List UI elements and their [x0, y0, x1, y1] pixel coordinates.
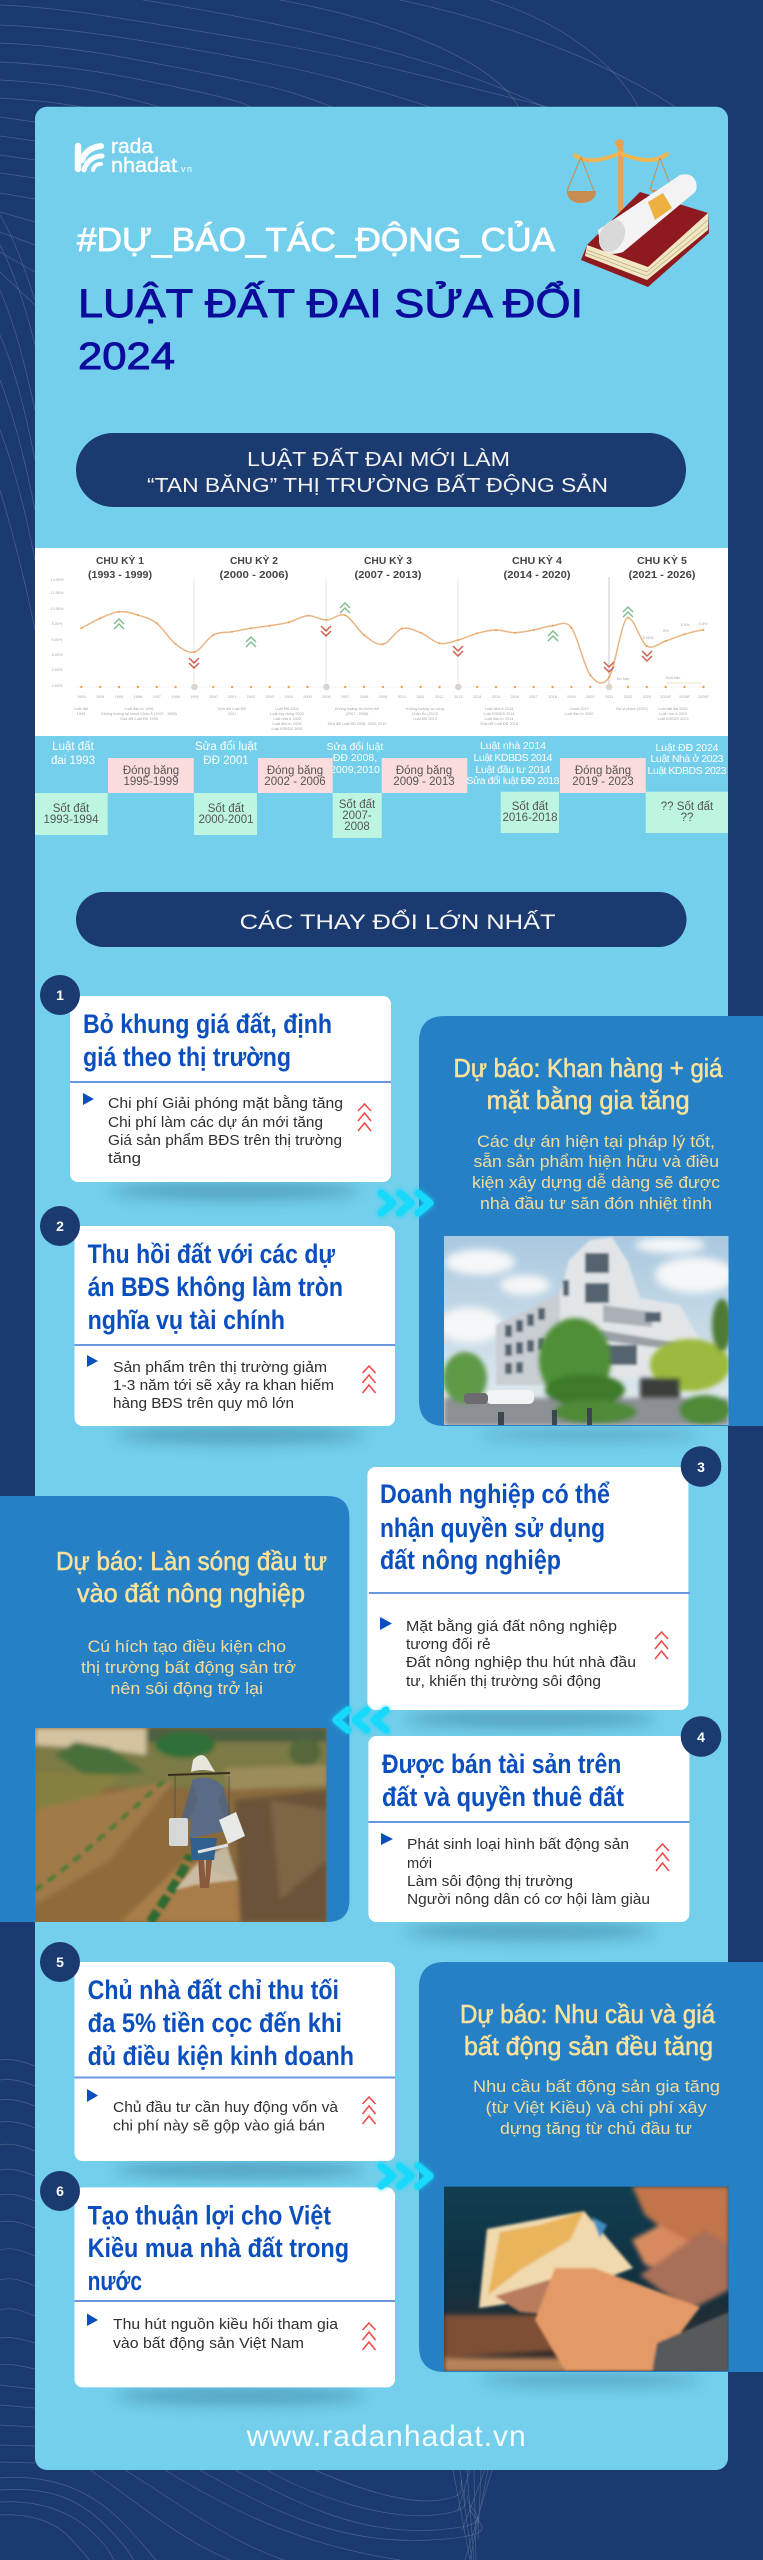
- icon: logo mark: [78, 146, 102, 170]
- law labels: ĐĐ 2001: [203, 755, 249, 767]
- card 6 text: Thu hút nguồn kiều hối tham gia: [113, 2316, 339, 2333]
- forecast 3 text: [473, 2077, 720, 2138]
- bullet: [380, 1617, 392, 1630]
- card 2 text: 1-3 năm tới sẽ xảy ra khan hiếm: [113, 1377, 334, 1394]
- forecast 1 text: sẵn sản phẩm hiện hữu và điều: [474, 1152, 719, 1171]
- growth curve: [81, 612, 703, 683]
- year labels: 2019: [567, 695, 576, 699]
- year labels: 2012: [435, 695, 444, 699]
- card 1 text: Chi phí Giải phóng mặt bằng tăng: [108, 1095, 343, 1112]
- year labels: 1996: [134, 695, 142, 699]
- number badge 4: 4: [697, 1729, 705, 1745]
- card 6 text: [113, 2316, 339, 2352]
- event notes: Luật nhà ở 2005: [273, 717, 301, 721]
- logo: [78, 136, 192, 177]
- card 5 heading: [88, 1975, 354, 2071]
- number badge 1: 1: [56, 987, 64, 1003]
- event notes: Luật đất đai 2024: [658, 707, 688, 711]
- card 2 heading: nghĩa vụ tài chính: [88, 1305, 285, 1335]
- forecast values: 5.05%: [643, 636, 654, 640]
- bullet: [87, 2314, 98, 2326]
- cycle headings: (2007 - 2013): [354, 569, 422, 581]
- forecast 1 heading: [454, 1053, 723, 1115]
- event notes: Luật Nhà ở 2014: [485, 707, 513, 711]
- card 6 text: vào bất động sản Việt Nam: [113, 2335, 304, 2352]
- y axis labels: 4.00%: [52, 653, 63, 657]
- y axis labels: [51, 578, 64, 688]
- year labels: 2001: [228, 695, 236, 699]
- timeline: laws, freezes and land fevers: [35, 740, 728, 838]
- event notes: Sửa đổi Luật ĐĐ 2018: [480, 722, 518, 726]
- event notes: [74, 707, 689, 731]
- card 3 text: [406, 1618, 636, 1690]
- land fever boxes: 2007-: [342, 810, 372, 822]
- year labels: 2016: [511, 695, 519, 699]
- land fever boxes: Sốt đất: [208, 803, 245, 815]
- number badge 5: 5: [56, 1954, 64, 1970]
- freeze boxes: Đóng băng: [123, 765, 179, 777]
- year labels: 2017: [529, 695, 538, 699]
- forecast 3 heading: Dự báo: Nhu cầu và giá: [460, 1999, 715, 2029]
- law labels: Sửa đổi luật ĐĐ 2018: [466, 775, 560, 787]
- law labels: Sửa đổi luật: [327, 741, 383, 753]
- card 5 text: Chủ đầu tư cần huy động vốn và: [113, 2099, 339, 2116]
- card 4 heading: đất và quyền thuê đất: [382, 1782, 624, 1812]
- forecast 1 text: kiện xây dựng dễ dàng sẽ được: [472, 1173, 721, 1192]
- event notes: Khủng hoảng tài chính Châu Á (1997 - 1998): [101, 712, 178, 716]
- forecast values: 6.5%: [681, 623, 690, 627]
- card 2 text: Sản phẩm trên thị trường giảm: [113, 1359, 327, 1376]
- icon: red up chevrons: [362, 1366, 376, 1393]
- event notes: Nợ vi phạm (2022): [616, 707, 649, 711]
- year labels: 2007: [341, 695, 349, 699]
- land fever boxes: 2000-2001: [198, 814, 254, 826]
- forecast 2 heading: Dự báo: Làn sóng đầu tư: [56, 1546, 327, 1576]
- freeze boxes: [108, 758, 646, 793]
- year labels: 2011: [417, 695, 425, 699]
- event notes: 2001: [228, 712, 236, 716]
- arrow: to forecast 1: [381, 1193, 430, 1213]
- event notes: Luật đầu tư 2020: [565, 712, 593, 716]
- event notes: Luật đầu tư 2005: [273, 722, 301, 726]
- forecast 1 heading: mặt bằng gia tăng: [487, 1085, 690, 1115]
- event notes: Sửa đổi Luật ĐĐ: [218, 707, 246, 711]
- logo text: [111, 136, 192, 177]
- land fever boxes: [35, 792, 728, 838]
- icon: red up chevrons: [362, 2097, 376, 2124]
- card 2 heading: án BĐS không làm tròn: [88, 1272, 343, 1302]
- icon: red up chevrons: [362, 2323, 376, 2350]
- forecast 2 text: thị trường bất động sản trở: [81, 1658, 296, 1677]
- year labels: 1994: [96, 695, 104, 699]
- year labels: 2021: [605, 695, 613, 699]
- event notes: Sửa đổi Luật ĐĐ 2008, 2009, 2010: [328, 722, 386, 726]
- card 5 text: [113, 2099, 339, 2134]
- year labels: 2024F: [660, 695, 672, 699]
- number badge 3: 3: [697, 1459, 705, 1475]
- hashtag heading: #DỰ_BÁO_TÁC_ĐỘNG_CỦA: [77, 221, 556, 259]
- year labels: 2022: [624, 695, 632, 699]
- event notes: Covid 2019: [569, 707, 589, 711]
- heading pill: biggest changes: [76, 892, 686, 947]
- freeze boxes: 2009 - 2013: [393, 776, 455, 788]
- panel: forecast 2: [0, 1496, 349, 1922]
- event notes: Luật đầu tư 2014: [485, 717, 513, 721]
- panel: forecast 3: [419, 1962, 763, 2372]
- heading pill: biggest changes: CÁC THAY ĐỔI LỚN NHẤT: [240, 910, 556, 934]
- y axis labels: 12.00%: [51, 591, 64, 595]
- forecast values: 6.8%: [699, 622, 708, 626]
- card 2 text: hàng BĐS trên quy mô lớn: [113, 1395, 294, 1412]
- logo text: nhadat: [111, 155, 177, 177]
- y axis labels: 6.00%: [52, 638, 63, 642]
- photo: farmer watering field: [35, 1728, 327, 1922]
- heading pill: thị trường: [76, 433, 686, 507]
- photo: apartment building: [438, 1236, 735, 1426]
- land fever boxes: Sốt đất: [339, 799, 376, 811]
- forecast 2 text: [81, 1637, 296, 1698]
- card 1 heading: Bỏ khung giá đất, định: [83, 1009, 332, 1039]
- freeze boxes: Đóng băng: [575, 765, 631, 777]
- land fever boxes: ?? Sốt đất: [661, 801, 714, 813]
- arrow: to forecast 2: [336, 1710, 386, 1730]
- heading pill: thị trường: LUẬT ĐẤT ĐAI MỚI LÀM: [247, 448, 510, 471]
- card 1 heading: giá theo thị trường: [83, 1042, 291, 1072]
- forecast 2 text: nên sôi động trở lại: [110, 1679, 263, 1698]
- law labels: Luật ĐĐ 2024: [656, 742, 719, 754]
- year labels: 2002: [247, 695, 255, 699]
- year labels: 1998: [171, 695, 180, 699]
- card 3 heading: đất nông nghiệp: [380, 1545, 561, 1575]
- card 4 text: Người nông dân có cơ hội làm giàu: [407, 1891, 650, 1908]
- red down chevrons: [189, 626, 652, 672]
- bullet: [87, 2089, 98, 2102]
- freeze boxes: 1995-1999: [124, 776, 178, 788]
- forecast 3 heading: [460, 1999, 715, 2061]
- law labels: đai 1993: [51, 755, 95, 767]
- law labels: Luật đất: [52, 741, 95, 753]
- event notes: Luật ĐĐ 2013: [413, 717, 437, 721]
- law labels: Luật KDBDS 2014: [474, 752, 553, 764]
- forecast 2 heading: [56, 1546, 327, 1608]
- year labels: 2006: [322, 695, 331, 699]
- logo text: rada: [111, 136, 154, 158]
- card 6 heading: Kiều mua nhà đất trong: [88, 2233, 349, 2263]
- card 2 heading: [88, 1239, 343, 1335]
- card 3 text: Đất nông nghiệp thu hút nhà đầu: [406, 1654, 636, 1671]
- forecast 1 text: nhà đầu tư săn đón nhiệt tình: [480, 1194, 712, 1213]
- event notes: Khủng hoảng tài chính thế: [335, 707, 380, 711]
- card 5 text: chi phí này sẽ gộp vào giá bán: [113, 2118, 325, 2134]
- law labels: ĐĐ 2008,: [333, 752, 377, 764]
- card 3 text: Mặt bằng giá đất nông nghiệp: [406, 1618, 617, 1635]
- card 4 heading: [382, 1749, 624, 1812]
- card 4: [368, 1736, 689, 1922]
- freeze boxes: 2019 - 2023: [572, 776, 634, 788]
- card 4 text: Phát sinh loại hình bất động sản: [407, 1836, 629, 1853]
- card 1 text: Giá sản phẩm BĐS trên thị trường: [108, 1132, 342, 1149]
- card 5 heading: đa 5% tiền cọc đến khi: [88, 2008, 342, 2038]
- year heading: 2024: [78, 336, 175, 378]
- card 6: [74, 2187, 395, 2387]
- card 5 heading: Chủ nhà đất chỉ thu tối: [88, 1975, 339, 2005]
- card 1 text: Chi phí làm các dự án mới tăng: [108, 1114, 323, 1131]
- card 4 text: mới: [407, 1855, 432, 1872]
- card 4 text: Làm sôi động thị trường: [407, 1873, 573, 1890]
- bullet: [87, 1355, 98, 1367]
- cycle headings: (2021 - 2026): [628, 569, 696, 581]
- year labels: 1999: [190, 695, 199, 699]
- number badge 2: [40, 1206, 80, 1246]
- y axis labels: 2.00%: [52, 668, 63, 672]
- bullet: [381, 1833, 393, 1845]
- year labels: 2020: [586, 695, 595, 699]
- year labels: 1993: [77, 695, 86, 699]
- year labels: 2009: [379, 695, 387, 699]
- y axis labels: 0.00%: [52, 684, 63, 688]
- year labels: 2000: [209, 695, 218, 699]
- card 5: [74, 1962, 395, 2161]
- y axis labels: 8.00%: [52, 622, 63, 626]
- land fever boxes: ??: [681, 812, 693, 824]
- forecast 3 text: dựng tăng từ chủ đầu tư: [500, 2119, 692, 2138]
- card 6 heading: [88, 2201, 349, 2296]
- green up chevrons: [114, 603, 633, 647]
- forecast 3 text: (từ Việt Kiều) và chi phí xây: [486, 2098, 707, 2117]
- heading pill: thị trường: “TAN BĂNG” THỊ TRƯỜNG BẤT ĐỘNG SẢN: [147, 474, 608, 497]
- year labels: 2015: [492, 695, 500, 699]
- event notes: Luật nhà ở 2023: [659, 712, 687, 716]
- year labels: 2004: [284, 695, 293, 699]
- cycle headings: CHU KỲ 1: [96, 554, 144, 567]
- event notes: Luật KDBDS 2014: [483, 712, 515, 716]
- cycle headings: CHU KỲ 4: [512, 554, 562, 567]
- cycle headings: (2014 - 2020): [504, 569, 570, 581]
- land fever boxes: 1993-1994: [44, 814, 99, 826]
- card 2: [74, 1226, 395, 1426]
- law labels: Sửa đổi luật: [195, 741, 258, 753]
- card 1 heading: [83, 1009, 332, 1072]
- icon: red up chevrons: [655, 1632, 668, 1659]
- event notes: (2007 - 2008): [346, 712, 369, 716]
- arrow: to forecast 3: [381, 2166, 430, 2186]
- law labels: Luật đầu tư 2014: [476, 764, 551, 776]
- cycle headings: [88, 554, 696, 581]
- forecast 3 text: Nhu cầu bất động sản gia tăng: [473, 2077, 720, 2096]
- number badge 5: [40, 1942, 80, 1982]
- year labels: 2008: [360, 695, 368, 699]
- forecast values: [617, 622, 708, 683]
- card 1 text: [108, 1095, 343, 1167]
- card 3: [367, 1467, 690, 1710]
- year labels: 2018: [548, 695, 557, 699]
- card 4 heading: Được bán tài sản trên: [382, 1749, 621, 1779]
- title: [77, 221, 583, 378]
- law labels: Luật KDBDS 2023: [648, 765, 727, 777]
- year labels: 2005: [303, 695, 312, 699]
- event notes: Luật đất: [74, 707, 89, 711]
- law labels: 2009,2010: [330, 764, 380, 776]
- forecast 1 text: [472, 1132, 721, 1213]
- card 3 text: tư, khiến thị trường sôi động: [406, 1673, 601, 1690]
- forecast 2 heading: vào đất nông nghiệp: [77, 1578, 305, 1608]
- forecast values: 6%: [663, 629, 669, 633]
- year labels: [77, 695, 709, 699]
- icon: scales, book and scroll: [567, 139, 709, 287]
- law labels: [51, 740, 727, 787]
- y axis labels: 14.00%: [51, 578, 64, 582]
- cycle headings: CHU KỲ 3: [364, 554, 412, 567]
- logo text: .vn: [177, 164, 192, 174]
- number badge 4: [681, 1716, 721, 1757]
- card 1: [70, 996, 391, 1182]
- land fever boxes: 2008: [344, 821, 370, 833]
- year labels: 2013: [454, 695, 463, 699]
- number badge 3: [681, 1446, 721, 1487]
- card 1 text: tăng: [108, 1150, 141, 1167]
- year labels: 2014: [473, 695, 481, 699]
- law labels: Luật Nhà ở 2023: [650, 753, 724, 765]
- year labels: 1997: [152, 695, 161, 699]
- cycle headings: CHU KỲ 2: [230, 554, 278, 567]
- forecast 1 text: Các dự án hiện tại pháp lý tốt,: [477, 1132, 715, 1151]
- bullet: [83, 1093, 94, 1105]
- forecast values: Kịch bản: [666, 676, 680, 680]
- card 2 heading: Thu hồi đất với các dự: [88, 1239, 335, 1269]
- freeze boxes: Đóng băng: [267, 765, 323, 777]
- card 4 text: [407, 1836, 650, 1908]
- panel: market cycle chart: [35, 548, 728, 736]
- law labels: Luật nhà 2014: [480, 740, 546, 752]
- panel: forecast 1: [419, 1016, 763, 1426]
- year labels: 2025F: [679, 695, 691, 699]
- icon: red up chevrons: [656, 1844, 669, 1871]
- card 3 heading: Doanh nghiệp có thể: [380, 1479, 610, 1509]
- event notes: 1993: [77, 712, 85, 716]
- year labels: 2023: [643, 695, 651, 699]
- card 3 heading: nhận quyền sử dụng: [380, 1513, 605, 1543]
- photo: hands counting banknotes: [444, 2186, 729, 2372]
- forecast 2 text: Cú hích tạo điều kiện cho: [88, 1637, 286, 1656]
- event notes: Luật xây dựng 2003: [270, 712, 304, 716]
- website footer: www.radanhadat.vn: [246, 2420, 526, 2453]
- event notes: Luật đầu tư 1998: [125, 707, 153, 711]
- event notes: Luật ĐĐ 2003: [275, 707, 299, 711]
- forecast 3 heading: bất động sản đều tăng: [464, 2031, 713, 2061]
- year labels: 2003: [266, 695, 274, 699]
- year labels: 1995: [115, 695, 123, 699]
- y axis labels: 10.00%: [51, 607, 64, 611]
- event notes: Sửa đổi Luật ĐĐ 1998: [120, 717, 158, 721]
- card 6 heading: nước: [88, 2266, 142, 2296]
- forecast 1 heading: Dự báo: Khan hàng + giá: [454, 1053, 723, 1083]
- number badge 6: 6: [56, 2183, 64, 2199]
- cycle headings: (1993 - 1999): [88, 569, 152, 581]
- card 6 heading: Tạo thuận lợi cho Việt: [88, 2201, 331, 2231]
- cycle headings: CHU KỲ 5: [637, 554, 687, 567]
- land fever boxes: 2016-2018: [502, 812, 558, 824]
- card 3 heading: [380, 1479, 610, 1575]
- year labels: 2010: [398, 695, 406, 699]
- year labels: 2026F: [698, 695, 709, 699]
- number badge 1: [40, 975, 80, 1015]
- event notes: Luật KDBDS 2023: [657, 717, 689, 721]
- land fever boxes: Sốt đất: [53, 803, 90, 815]
- land fever boxes: Sốt đất: [512, 801, 549, 813]
- event notes: Châu Âu (2012): [412, 711, 439, 716]
- number badge 2: 2: [56, 1218, 64, 1234]
- main heading: LUẬT ĐẤT ĐAI SỬA ĐỔI: [78, 279, 583, 326]
- card 3 text: tương đối rẻ: [406, 1636, 490, 1653]
- icon: red up chevrons: [358, 1104, 371, 1131]
- event notes: Khủng hoảng nợ công: [406, 707, 444, 711]
- freeze boxes: 2002 - 2006: [264, 776, 326, 788]
- curve and axis points: [80, 611, 705, 690]
- card 5 heading: đủ điều kiện kinh doanh: [88, 2041, 354, 2071]
- card 2 text: [113, 1359, 334, 1412]
- number badge 6: [40, 2171, 80, 2211]
- cycle headings: (2000 - 2006): [220, 569, 288, 581]
- event notes: Luật KDBDS 2006: [271, 727, 303, 731]
- forecast values: Dự báo: [617, 677, 629, 681]
- freeze boxes: Đóng băng: [396, 765, 452, 777]
